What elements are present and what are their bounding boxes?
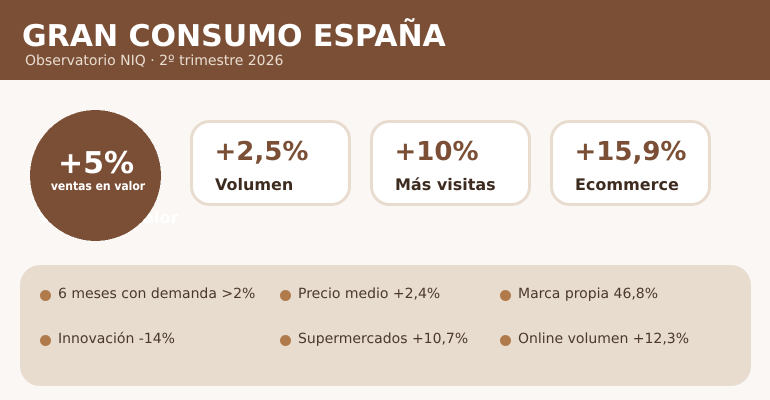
card: ecommerce bbox=[552, 122, 710, 204]
bullet: precio: Precio medio +2,4% bbox=[298, 286, 440, 302]
hero label: ventas en valor bbox=[51, 179, 146, 193]
panel: secondary metrics bbox=[20, 265, 751, 386]
card label: Más visitas bbox=[395, 175, 496, 194]
hero value: +5% bbox=[58, 146, 134, 181]
card label: Volumen bbox=[215, 175, 293, 194]
card value: +2,5% bbox=[214, 137, 308, 167]
card: visitas bbox=[372, 122, 530, 204]
bullet: marca propia: Marca propia 46,8% bbox=[518, 286, 658, 302]
subtitle: Observatorio NIQ · 2º trimestre 2026 bbox=[25, 53, 283, 69]
hidden label behind circle: Ventas en valor bbox=[38, 208, 178, 227]
title: GRAN CONSUMO ESPAÑA bbox=[22, 18, 447, 54]
hero metric circle bbox=[30, 110, 178, 241]
card: volumen bbox=[192, 122, 350, 204]
bullet: supermercados: Supermercados +10,7% bbox=[298, 331, 468, 347]
bullet: demanda: 6 meses con demanda >2% bbox=[58, 286, 255, 302]
circle bbox=[30, 110, 161, 241]
header band bbox=[0, 0, 770, 80]
card label: Ecommerce bbox=[575, 175, 679, 194]
bullet: innovacion: Innovación -14% bbox=[58, 331, 175, 347]
card value: +10% bbox=[394, 137, 479, 167]
bullet: online: Online volumen +12,3% bbox=[518, 331, 689, 347]
card value: +15,9% bbox=[574, 137, 686, 167]
